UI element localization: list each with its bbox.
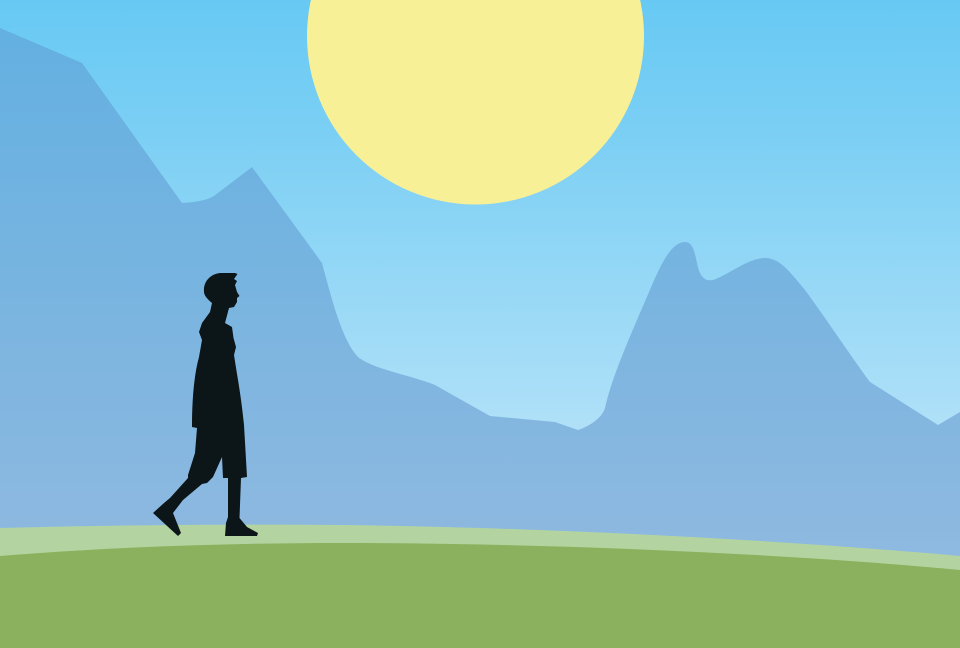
grass <box>0 543 960 648</box>
person silhouette <box>153 273 258 536</box>
hill highlight <box>0 525 960 648</box>
sky <box>0 0 960 440</box>
sun <box>307 0 644 204</box>
